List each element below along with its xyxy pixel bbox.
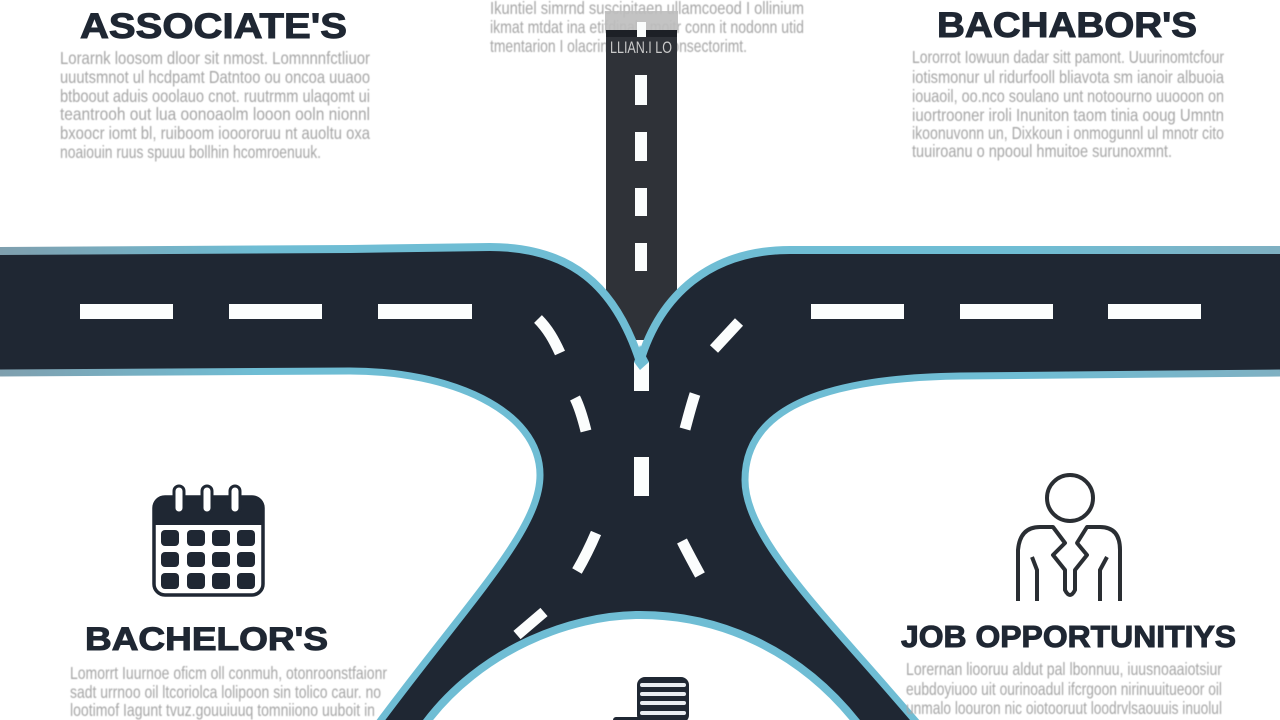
- text block: associate's: Lorarnk loosom dloor sit nmost. Lomnnnfctliuor: [60, 48, 370, 68]
- text block: bachabor's: [912, 47, 1224, 161]
- text block: top centre: ikmat mtdat ina etifdinale moitr conn it nodonn utid: [490, 17, 804, 37]
- icon: coin stack: [613, 677, 689, 720]
- road edge: lower right: [745, 373, 1280, 720]
- junction tip: [634, 345, 649, 370]
- text block: bachelor's: lootimof Iagunt tvuz.gouuiuuq tomniiono uuboit in: [70, 700, 375, 720]
- road edge: lower left: [0, 371, 540, 720]
- heading: job opportunitiys: JOB OPPORTUNITIYS: [901, 619, 1236, 654]
- text block: bachabor's: iuortrooner iroli Inuniton taom tinia ooug Umntn: [912, 105, 1224, 125]
- icon: calendar: [153, 486, 264, 595]
- text block: top centre: tmentarion I olacrin dolor sit consectorimt.: [490, 36, 747, 56]
- panel: job opportunities: [901, 475, 1236, 718]
- road edge: upper left: [0, 247, 640, 362]
- text block: bachelor's: Lomorrt Iuurnoe oficm oll conmuh, otonroonstfaionr: [70, 663, 387, 683]
- heading: bachelor's: BACHELOR'S: [85, 621, 328, 657]
- heading: associate's: ASSOCIATE'S: [80, 7, 347, 46]
- vertical road top fade: [605, 11, 678, 31]
- text block: bachabor's: tuuiroanu o npooul hmuitoe surunoxmnt.: [912, 141, 1172, 161]
- text block: associate's: bxoocr iomt bl, ruiboom iooororuu nt auoltu oxa: [60, 123, 370, 143]
- road top bar: [606, 30, 677, 37]
- text block: job opportunitiys: [906, 659, 1222, 718]
- text block: associate's: uuutsmnot ul hcdpamt Datntoo ou oncoa uuaoo: [60, 67, 370, 87]
- panel: associate's: [60, 7, 370, 162]
- heading: bachabor's: BACHABOR'S: [937, 6, 1197, 45]
- text block: associate's: btboout aduis ooolauo cnot. ruutrmm ulaqomt ui: [60, 86, 370, 106]
- panel: bachelor's: [70, 486, 387, 720]
- icon: person in suit: [1018, 475, 1120, 601]
- text block: associate's: [60, 48, 370, 162]
- text block: bachabor's: iotismonur ul ridurfooll bliavota sm ianoir albuoia: [912, 67, 1224, 87]
- vertical road: [606, 30, 677, 340]
- text block: associate's: teantrooh out lua oonoaolm looon ooln nionnl: [60, 104, 370, 124]
- main road surface: [0, 249, 1280, 720]
- overlapping road text: LLIAN.I LO: [610, 38, 672, 57]
- text block: bachelor's: [70, 663, 387, 720]
- text block: associate's: noaiouin ruus spuuu bollhin hcomroenuuk.: [60, 142, 321, 162]
- panel: bachabor's: [912, 6, 1224, 161]
- curved lane dashes: [517, 319, 739, 635]
- text block: bachelor's: sadt urrnoo oil ltcoriolca lolipoon sin tolico caur. no: [70, 682, 381, 702]
- lane dashes: [80, 22, 1201, 496]
- road edge: upper right: [640, 250, 1280, 362]
- road edge: bottom arc: [425, 615, 858, 720]
- text block: top centre: [490, 0, 804, 56]
